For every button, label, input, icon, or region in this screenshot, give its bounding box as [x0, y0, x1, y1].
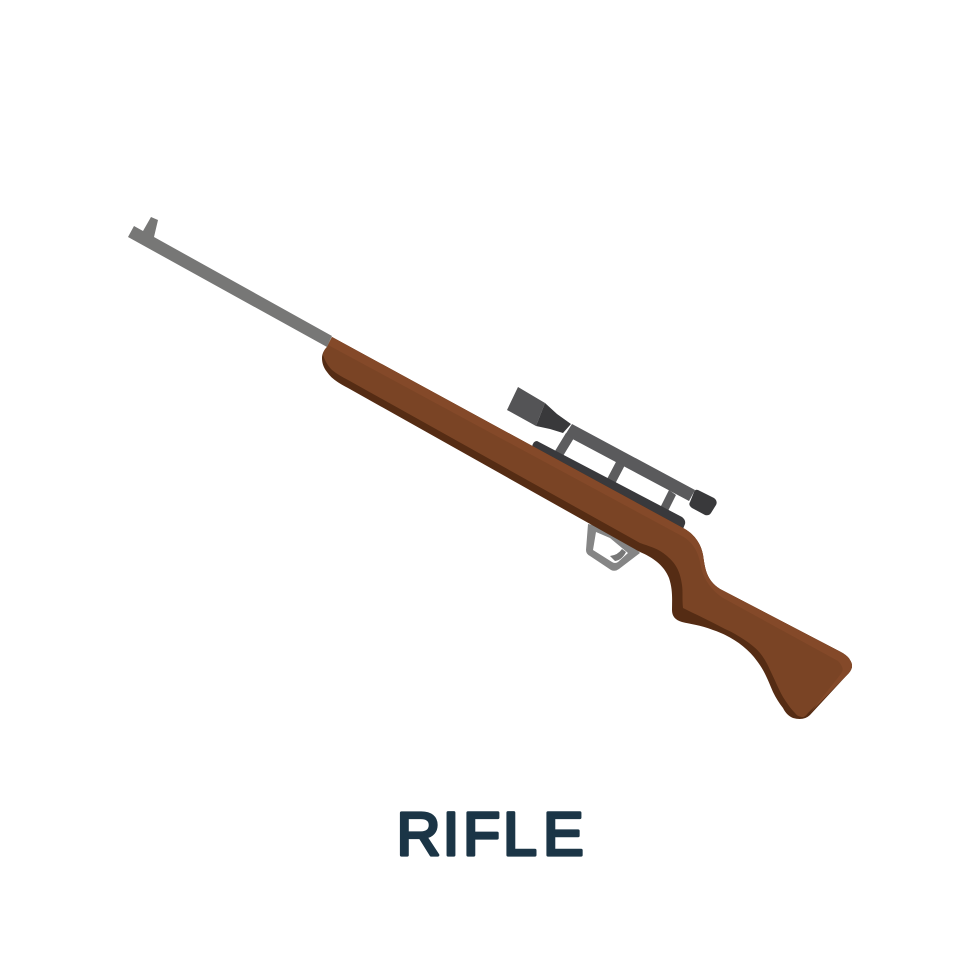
scope tube	[565, 424, 695, 501]
trigger guard	[586, 524, 640, 571]
scope mounts	[555, 433, 676, 513]
scope eyepiece	[689, 490, 717, 515]
stock dark underside	[322, 337, 852, 719]
barrel	[128, 217, 332, 347]
stock main wood	[323, 337, 852, 717]
icon: rifle	[128, 217, 852, 719]
scope rail	[532, 441, 685, 529]
scope	[507, 387, 717, 529]
stock highlight edge	[328, 337, 852, 713]
title: RIFLE	[396, 800, 584, 868]
scope objective lens	[507, 387, 545, 426]
